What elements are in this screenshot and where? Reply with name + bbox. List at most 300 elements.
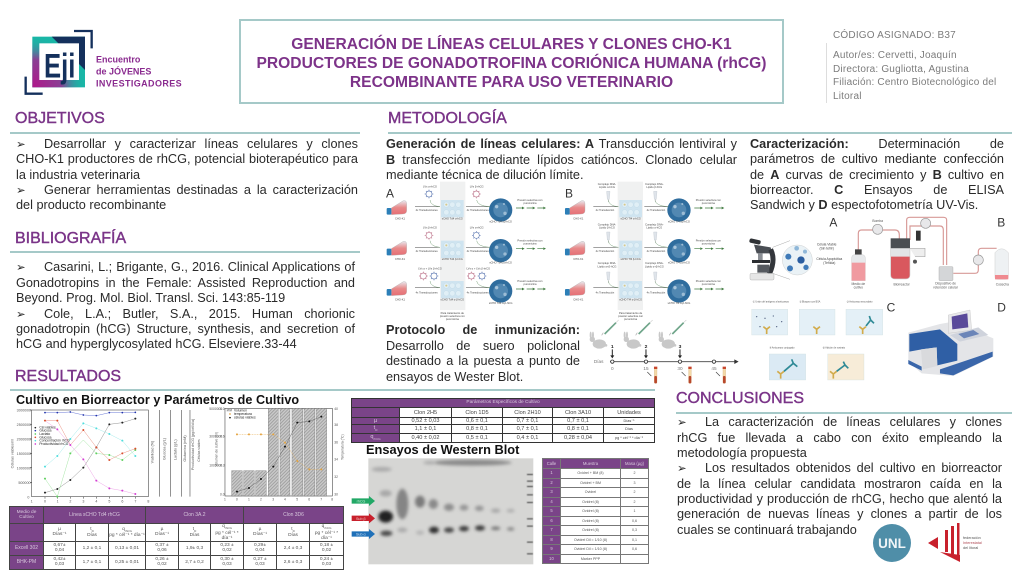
table: specific culture parameters: µ	[374, 418, 377, 424]
text: objetivos list	[16, 136, 358, 212]
text: references	[16, 260, 356, 350]
figure C: ELISA sandwich steps: ⑤ Adición de sustrato	[823, 346, 846, 349]
line chart: culture kinetics: Glucosa (g/L)	[163, 438, 167, 460]
line chart: culture kinetics: 1	[31, 500, 33, 504]
text: objetivos list: Desarrollar y caracterizar líneas celulares y clones	[44, 136, 358, 150]
text: conclusions list: ➢	[677, 461, 687, 475]
table: culture parameters	[9, 506, 344, 570]
figure B: lipid transfection: Lípido α-hCG	[599, 185, 615, 189]
figure B: lipid transfection: CHO-K1	[573, 297, 584, 301]
figure B: lipid transfection: Complejo DNA-	[645, 223, 664, 227]
table: western blot lanes: Marker PPP	[581, 557, 600, 561]
table: specific culture parameters: 0,40 ± 0,02	[412, 435, 439, 441]
logo: Encuentro de Jóvenes Investigadores: INVESTIGADORES	[96, 78, 182, 88]
table: western blot lanes: 0,1	[632, 538, 637, 542]
figure A: lentiviral transduction: Presión selectiva con	[517, 239, 543, 243]
text: conclusions list: rhCG fue llevada a cabo con éxito empleando la	[677, 430, 1002, 444]
logo: Encuentro de Jóvenes Investigadores	[26, 31, 182, 94]
table: culture parameters: Días⁻¹	[52, 532, 66, 537]
figure A: lentiviral transduction: sCHO Td4 α-hCG	[442, 216, 463, 220]
table: specific culture parameters: 0,7 ± 0,1	[517, 418, 538, 424]
table: culture parameters: 0,30 ±	[220, 557, 234, 562]
text: protocolo de inmunización: destinado a la puesta a punto de	[386, 354, 580, 368]
figure A: microscope and cells: Célula Viable	[817, 242, 837, 246]
table: specific culture parameters: tD	[374, 425, 377, 432]
table: western blot lanes: 6	[550, 518, 553, 523]
table: culture parameters: Medio de Cultivo	[17, 510, 36, 520]
figure B: lipid transfection: presión selectiva con	[618, 314, 644, 318]
bar and line chart: bioreactor: 36	[334, 440, 338, 444]
bar and line chart: bioreactor: 2	[260, 498, 262, 502]
panel: conclusiones	[676, 390, 1012, 536]
author information	[826, 29, 996, 103]
table: culture parameters: 2,6 ± 0,3	[284, 560, 302, 565]
table: culture parameters: µ	[161, 527, 163, 532]
figure B: lipid transfection: sCHO Tf4 β-hCG	[620, 257, 641, 261]
arrow: rhCG band: rhCG	[357, 500, 366, 504]
table: culture parameters: 0,29±	[254, 543, 266, 548]
heading: objetivos: OBJETIVOS	[15, 110, 105, 127]
bar and line chart: bioreactor: 1	[248, 498, 250, 502]
text: conclusions list: La caracterización de líneas celulares y clones	[705, 414, 1002, 428]
bar and line chart: bioreactor: 0.0	[220, 492, 225, 496]
figure B: lipid transfection: sCHO Tf4 αβ-hCG	[668, 220, 690, 224]
line chart: culture kinetics: Glucosa	[39, 429, 52, 433]
line chart: culture kinetics: Lactato	[39, 432, 50, 436]
table: specific culture parameters: 0,28 ± 0,04	[564, 435, 592, 441]
logo: Federación Interestatal del Litoral: Interestatal	[963, 541, 982, 545]
figure A: lentiviral transduction: puromicina	[523, 201, 537, 205]
table: culture parameters: µ	[58, 527, 61, 532]
table: culture parameters: 0,25 ± 0,01	[115, 560, 139, 565]
table: culture parameters: 0,06	[157, 548, 167, 553]
table: specific culture parameters: Unidades	[617, 410, 641, 416]
text: caracterización: Sandwich y D espectofotometría UV-Vis.	[750, 198, 978, 212]
figure A: lentiviral transduction: LVs β-rhCG	[470, 184, 484, 188]
figure A: microscope and cells	[749, 216, 842, 280]
text: conclusions list: Los resultados obtenidos del cultivo en biorreactor	[705, 461, 1002, 475]
figure B: lipid transfection: Complejo DNA-	[598, 182, 616, 186]
table: culture parameters: 1,9± 0,3	[186, 546, 203, 551]
figure A: lentiviral transduction: puromicina	[446, 317, 459, 321]
table: culture parameters: 0,03	[322, 562, 331, 567]
table: culture parameters: 0,23 ±	[220, 543, 234, 548]
figure B: lipid transfection: sCHO Tf4 α-hCG	[620, 216, 641, 220]
title box: GENERACIÓN DE LÍNEAS CELULARES Y CLONES CHO-K1	[291, 36, 732, 53]
arrow: Sub β band: Sub β	[356, 517, 366, 521]
table: western blot lanes: 2	[634, 500, 636, 504]
timeline: immunization schedule: 15	[643, 366, 649, 371]
figure B: lipid transfection: Presión selectiva con	[696, 198, 721, 202]
heading: bibliografía: BIBLIOGRAFÍA	[15, 230, 126, 247]
table: western blot lanes	[542, 458, 649, 564]
table: western blot lanes: Ovidrel (8)	[582, 528, 599, 532]
table: western blot lanes: Ovidrel + BM	[580, 481, 601, 485]
table: culture parameters: BHK-PM	[17, 559, 36, 565]
text: caracterización: Caracterización: Determinación de	[750, 137, 1004, 151]
figure B: bioreactor setup: Bomba	[872, 219, 883, 223]
figure B: lipid transfection: Lípido β-hCG	[646, 185, 662, 189]
timeline: immunization schedule: Días	[594, 359, 604, 364]
line chart: culture kinetics: Viabilidad (%)	[150, 441, 154, 463]
figure B: lipid transfection: sCHO Tf4 α-β-hCG	[668, 301, 690, 305]
text: generación de líneas celulares: B transfección mediante lípidos catióncos. Clonado celular	[386, 152, 737, 166]
panel: objetivos	[10, 110, 360, 212]
bar and line chart: bioreactor: 6	[308, 498, 310, 502]
timeline: immunization schedule: 45	[711, 366, 717, 371]
figure A: lentiviral transduction: 4x Transducciones	[467, 249, 489, 253]
figure A: microscope and cells: Célula Apoptótica	[816, 257, 842, 261]
figure A: lentiviral transduction: sCHO Td4 β-hCG	[442, 257, 463, 261]
bar and line chart: bioreactor: 5000000	[209, 407, 222, 411]
text: conclusions list: cuales se continuará trabajando	[677, 522, 857, 536]
figure B: bioreactor setup: Medio de	[851, 282, 865, 286]
table: culture parameters: µ	[259, 527, 261, 532]
text: references: Gonadotropins in the Female: Assisted Reproduction and	[16, 276, 355, 290]
table: culture parameters: Días	[190, 533, 199, 538]
table: western blot lanes: 8	[550, 537, 553, 542]
table: western blot lanes: 9	[550, 546, 553, 551]
text: protocolo de inmunización: Protocolo de inmunización:	[386, 323, 580, 337]
line chart: culture kinetics: 2500000	[17, 423, 31, 427]
title box: PRODUCTORES DE GONADOTROFINA CORIÓNICA HUMANA (rhCG)	[257, 55, 766, 72]
table: western blot lanes: Masa (µg)	[625, 460, 644, 466]
author information: Autor/es: Cervetti, Joaquín	[833, 50, 957, 61]
text: references: gonadotropin (hCG) Structure, synthesis, and secretion of	[16, 322, 355, 336]
table: culture parameters: 0,02	[322, 548, 331, 553]
table: specific culture parameters: 0,52 ± 0,03	[412, 418, 439, 424]
bar and line chart: bioreactor: 3000000	[209, 434, 222, 438]
text: references: ➢	[16, 306, 26, 320]
table: western blot lanes: 0,6	[632, 547, 637, 551]
figure B: bioreactor setup: Cosecha	[996, 283, 1009, 287]
table: western blot lanes: 1	[550, 470, 553, 475]
text: generación de líneas celulares: mediante técnica de dilución límite.	[386, 168, 583, 182]
figure A: lentiviral transduction: Presión selectiva con	[517, 198, 543, 202]
arrow: Sub α band	[352, 529, 375, 539]
timeline: immunization schedule: 3	[679, 344, 682, 350]
line chart: culture kinetics: 0	[27, 495, 29, 499]
text: protocolo de inmunización	[386, 323, 580, 384]
figure A: lentiviral transduction: 4x Transducciones	[467, 290, 489, 294]
line chart: culture kinetics: Productividad rhCG (pg/cél/día)	[191, 419, 195, 470]
text: caracterización: biorreactor. C Ensayos de ELISA	[750, 183, 1004, 197]
table: culture parameters: Clon 3A.2	[184, 512, 206, 518]
line chart: culture kinetics: 2	[69, 500, 71, 504]
figure C: ELISA sandwich steps: C	[887, 300, 896, 314]
table: specific culture parameters: 1,1 ± 0,1	[415, 426, 436, 432]
figure A: lentiviral transduction: CHO-K1	[395, 297, 406, 301]
table: culture parameters: 1,7 ± 0,1	[83, 560, 101, 565]
author information: Litoral	[833, 91, 862, 102]
figure A: lentiviral transduction: LVs α + LVs β-rhCG	[418, 266, 442, 270]
table: culture parameters: qrhCG	[222, 524, 232, 530]
figure: western blot membrane	[368, 458, 533, 564]
figure B: lipid transfection: Presión selectiva con	[696, 279, 721, 283]
text: objetivos list: ➢	[16, 136, 26, 150]
figure B: bioreactor setup: B	[997, 216, 1005, 230]
table: western blot lanes: Ovidrel + BM (8)	[577, 471, 604, 475]
bar and line chart: bioreactor: 38	[334, 423, 338, 427]
logo: Encuentro de Jóvenes Investigadores: Eji	[44, 47, 75, 85]
figure A: lentiviral transduction: LVs α-rhCG	[470, 226, 484, 230]
figure A: lentiviral transduction: sCHO Td4 α-β-hCG	[489, 301, 512, 305]
timeline: immunization schedule: 0	[611, 366, 614, 371]
figure B: lipid transfection: sCHO Tf4 α-β-hCG	[619, 298, 642, 302]
figure C: ELISA sandwich steps	[752, 300, 896, 380]
figure A: lentiviral transduction: 4x Transducciones	[467, 208, 489, 212]
figure A: lentiviral transduction: A	[386, 186, 394, 200]
figure B: lipid transfection: puromicina	[624, 317, 638, 321]
figure B: lipid transfection: Complejo DNA-	[598, 261, 616, 265]
table: specific culture parameters	[351, 398, 655, 443]
text: references: hCG and hyperglycosylated hCG. Elseviere.33-44	[16, 336, 297, 350]
bar and line chart: bioreactor: temperatura	[234, 412, 252, 416]
table: culture parameters: 0,04	[255, 548, 265, 553]
figure B: lipid transfection: Lípido β-hCG	[599, 226, 615, 230]
table: western blot lanes: 2	[634, 490, 636, 494]
figure B: bioreactor setup: cultivo	[854, 286, 863, 290]
figure B: lipid transfection: Para tratamiento de	[619, 311, 643, 315]
figure A: lentiviral transduction: puromicina	[523, 242, 537, 246]
text: objetivos list: del producto recombinante	[16, 198, 166, 212]
table: western blot lanes: Ovidrel Dil = 1/10 (8)	[574, 547, 607, 551]
line chart: culture kinetics: 3	[82, 500, 84, 504]
table: specific culture parameters: Parámetros Específicos de Cultivo	[466, 400, 540, 405]
line chart: culture kinetics: 3000000	[17, 409, 31, 413]
bar and line chart: bioreactor: 1.0	[220, 407, 225, 411]
line chart: culture kinetics	[11, 409, 195, 504]
figure A: lentiviral transduction: puromicina	[523, 282, 537, 286]
figure A: lentiviral transduction: LVs α-rhCG	[423, 184, 437, 188]
arrow: rhCG band	[352, 496, 375, 506]
timeline: immunization schedule: 30	[677, 366, 683, 371]
figure B: bioreactor setup: Dispositivo de	[935, 282, 956, 286]
bar and line chart: bioreactor: 3	[272, 498, 274, 502]
author information: Directora: Gugliotta, Agustina	[833, 64, 969, 75]
bar and line chart: bioreactor: 8	[331, 498, 333, 502]
table: western blot lanes: 5	[550, 508, 553, 513]
line chart: culture kinetics: Glucosa	[39, 435, 52, 439]
text: objetivos list: Generar herramientas destinadas a la caracterización	[44, 183, 358, 197]
table: culture parameters: 0,03	[55, 562, 64, 567]
table: specific culture parameters: Días	[625, 427, 633, 431]
line chart: culture kinetics: 8	[147, 500, 149, 504]
figure B: lipid transfection: 4x Transfección	[647, 249, 666, 253]
table: culture parameters: 0,37 ±	[155, 543, 169, 548]
bar and line chart: bioreactor: Células viables	[197, 439, 201, 462]
bar and line chart: bioreactor: 7	[320, 498, 322, 502]
arrow: Sub α band: Sub α	[356, 533, 367, 537]
figure A: lentiviral transduction: presión selectiva con	[440, 314, 465, 318]
table: culture parameters: 0,26 ±	[155, 557, 169, 562]
figure C: ELISA sandwich steps: ② Bloqueo con BSA	[799, 301, 821, 304]
table: specific culture parameters: 0,5 ± 0,1	[466, 435, 488, 441]
table: culture parameters: 0,42±	[54, 557, 65, 562]
figure A: lentiviral transduction: sCHO Td4 αβ-hCG	[489, 220, 512, 224]
author information: CÓDIGO ASIGNADO: B37	[833, 30, 956, 41]
table: culture parameters: pg * cél⁻¹ * día⁻¹	[315, 531, 338, 541]
text: conclusions list: metodología propuesta	[677, 446, 807, 460]
figure A: lentiviral transduction: 4x Transducciones	[416, 208, 438, 212]
figure A: lentiviral transduction	[386, 182, 546, 321]
table: culture parameters: qrhCG	[322, 524, 331, 530]
figure D: UV-Vis spectrophotometer: D	[997, 300, 1006, 314]
figure A: lentiviral transduction: LVs α + LVs β-rhCG	[467, 266, 490, 270]
figure A: lentiviral transduction: Para tratamiento de	[441, 311, 465, 315]
figure A: lentiviral transduction: 4x Transducciones	[416, 249, 438, 253]
line chart: culture kinetics: 500000	[18, 481, 31, 485]
table: specific culture parameters: 0,7 ± 0,1	[567, 418, 589, 424]
table: specific culture parameters: 0,6 ± 0,1	[466, 418, 488, 424]
timeline: immunization schedule: 2	[645, 344, 648, 350]
table: specific culture parameters: 0,8 ± 0,1	[567, 426, 589, 432]
figure A: lentiviral transduction: sCHO Td4 α-β-hCG	[441, 298, 464, 302]
bar and line chart: bioreactor: células viables	[234, 416, 256, 420]
text: protocolo de inmunización: Desarrollo de suero policlonal	[386, 338, 580, 352]
bar and line chart: bioreactor	[197, 407, 344, 502]
table: culture parameters: Días⁻¹	[253, 532, 267, 537]
text: references: Cole, L.A.; Butler, S.A., 2015. Human chorionic	[44, 306, 355, 320]
text: references: Casarini, L.; Brigante, G., 2016. Clinical Applications of	[44, 260, 355, 274]
table: specific culture parameters: Días⁻¹	[624, 419, 635, 423]
figure A: microscope and cells: A	[829, 216, 837, 230]
line chart: culture kinetics: Glutamina (mM)	[183, 435, 187, 462]
text: caracterización	[750, 137, 1004, 212]
figure B: lipid transfection: Complejo DNA-	[598, 223, 616, 227]
text: caracterización: de A curvas de crecimiento y B cultivo en	[750, 168, 1004, 182]
table: specific culture parameters: pg * cél⁻¹ * día⁻¹	[615, 436, 643, 440]
figure B: lipid transfection: B	[565, 186, 573, 200]
table: culture parameters: 0,03	[255, 562, 265, 567]
table: culture parameters: Días	[288, 533, 298, 538]
table: specific culture parameters: Clon 2H10	[514, 410, 541, 416]
bar and line chart: bioreactor: 0	[236, 498, 238, 502]
table: culture parameters: 2,7 ± 0,2	[185, 560, 204, 565]
table: western blot lanes: Ovidrel	[585, 490, 596, 494]
line chart: culture kinetics: Cél viables	[39, 426, 56, 430]
figure C: ELISA sandwich steps: ③ Anticuerpo secundario	[847, 301, 873, 304]
table: culture parameters: pg * cél⁻¹ * día⁻¹	[215, 531, 239, 541]
figure C: ELISA sandwich steps: ① Unión del antígeno al anticuerpo	[753, 301, 790, 304]
figure B: lipid transfection: 4x Transfección	[647, 208, 666, 212]
text: generación de líneas celulares: Generación de líneas celulares: A Transducción lentiviral y	[386, 137, 737, 151]
figure B: lipid transfection: sCHO Tf4 βα-hCG	[668, 260, 690, 264]
table: specific culture parameters: 0,4 ± 0,1	[517, 435, 538, 441]
logo: UNL: UNL	[878, 536, 906, 551]
figure A: lentiviral transduction: CHO-K1	[395, 216, 406, 220]
figure A: lentiviral transduction: CHO-K1	[395, 257, 406, 261]
text: objetivos list: la industria veterinaria	[16, 168, 140, 182]
figure A: microscope and cells: (Sin teñir)	[819, 246, 834, 250]
line chart: culture kinetics: Concentración rhCG	[39, 439, 70, 443]
text: conclusions list	[677, 414, 1002, 536]
table: culture parameters: Excell 302	[15, 545, 38, 551]
table: culture parameters: 0,02	[157, 562, 167, 567]
text: conclusions list: productividad y producción de rhCG, hecho que alentó la	[677, 492, 1002, 506]
figure B: lipid transfection: puromicina	[702, 282, 715, 286]
text: objetivos list: ➢	[16, 183, 26, 197]
text: generación de líneas celulares	[386, 137, 737, 182]
table: culture parameters: Días	[87, 533, 97, 538]
figure B: lipid transfection	[565, 182, 724, 321]
text: conclusions list: de la línea celular candidata mostraron caída en la	[677, 476, 1002, 490]
table: specific culture parameters: Clon 1D5	[465, 410, 489, 416]
line chart: culture kinetics: 1500000	[17, 452, 31, 456]
table: specific culture parameters: Clon 3A10	[565, 410, 591, 416]
bar and line chart: bioreactor: 5	[296, 498, 298, 502]
figure B: lipid transfection: Presión selectiva con	[696, 239, 721, 243]
table: western blot lanes: 2	[634, 471, 636, 475]
bar and line chart: bioreactor: 30	[334, 492, 338, 496]
table: culture parameters: Clon 3D6	[283, 512, 304, 518]
table: western blot lanes: 3	[634, 481, 636, 485]
figure B: lipid transfection: Lípido α-hCG	[646, 226, 662, 230]
arrow: Sub β band	[352, 513, 375, 523]
heading: metodología: METODOLOGÍA	[388, 110, 507, 127]
table: western blot lanes: Calle	[547, 460, 556, 466]
figure B: lipid transfection: CHO-K1	[573, 216, 584, 220]
bar and line chart: bioreactor: 0.3	[220, 464, 225, 468]
subheading: cultivo en biorreactor: Cultivo en Biorreactor y Parámetros de Cultivo	[16, 393, 299, 407]
figure C: ELISA sandwich steps: ④ Anticuerpo conjugado	[769, 346, 795, 349]
title box	[239, 19, 784, 104]
line chart: culture kinetics: 7	[134, 500, 136, 504]
figure B: lipid transfection: Lípido α+β-hCG	[645, 264, 664, 268]
table: western blot lanes: Ovidrel (8)	[582, 519, 599, 523]
bar and line chart: bioreactor: Volumen de cultivo (ml)	[214, 432, 218, 467]
table: western blot lanes: Ovidrel (8)	[582, 500, 599, 504]
table: culture parameters: Días⁻¹	[155, 532, 169, 537]
table: specific culture parameters: 0,8 ± 0,1	[466, 426, 488, 432]
logo: Federación Interestatal del Litoral: del litoral	[963, 546, 978, 550]
table: western blot lanes: 0,3	[632, 528, 637, 532]
figure A: lentiviral transduction: sCHO Td4 βα-hCG	[489, 260, 512, 264]
bar and line chart: bioreactor: 0.6	[220, 434, 225, 438]
bar and line chart: bioreactor: 1	[224, 498, 226, 502]
figure B: lipid transfection: Complejo DNA-	[645, 182, 664, 186]
bar and line chart: bioreactor: 32	[334, 475, 338, 479]
table: culture parameters: tD	[90, 526, 94, 532]
bar and line chart: bioreactor: 40	[334, 407, 338, 411]
text: conclusions list: ➢	[677, 414, 687, 428]
figure B: lipid transfection: 4x Transfección	[647, 290, 666, 294]
table: western blot lanes: 1	[634, 509, 636, 513]
table: western blot lanes: 10	[549, 556, 554, 561]
text: protocolo de inmunización: ensayos de Wester Blot.	[386, 370, 523, 384]
table: specific culture parameters: 0,7 ± 0,1	[517, 426, 538, 432]
logo: UNL	[873, 524, 911, 562]
line chart: culture kinetics: Células viables/ml	[11, 439, 15, 468]
logo: Federación Interestatal del Litoral: federación	[963, 536, 981, 540]
bar and line chart: bioreactor: Volumen	[234, 408, 247, 412]
table: western blot lanes: 4	[550, 499, 553, 504]
text: conclusions list: generación de nuevas líneas y clones a partir de los	[677, 507, 1002, 521]
line chart: culture kinetics: Lactato (g/L)	[174, 439, 178, 460]
figure B: lipid transfection: CHO-K1	[573, 257, 584, 261]
title box: RECOMBINANTE PARA USO VETERINARIO	[350, 74, 673, 91]
figure B: lipid transfection: Complejo DNA-	[645, 261, 664, 265]
line chart: culture kinetics: 2000000	[17, 438, 31, 442]
text: references: ➢	[16, 260, 26, 274]
subheading: ensayos de western blot: Ensayos de Western Blot	[366, 442, 519, 457]
table: culture parameters: 0,03	[222, 562, 232, 567]
table: culture parameters: 0,24 ±	[320, 557, 333, 562]
table: culture parameters: 1,2 ± 0,1	[83, 546, 101, 551]
table: culture parameters: pg * cél⁻¹ * día⁻¹	[109, 533, 145, 538]
table: western blot lanes: 7	[550, 527, 553, 532]
line chart: culture kinetics: 0	[44, 500, 46, 504]
